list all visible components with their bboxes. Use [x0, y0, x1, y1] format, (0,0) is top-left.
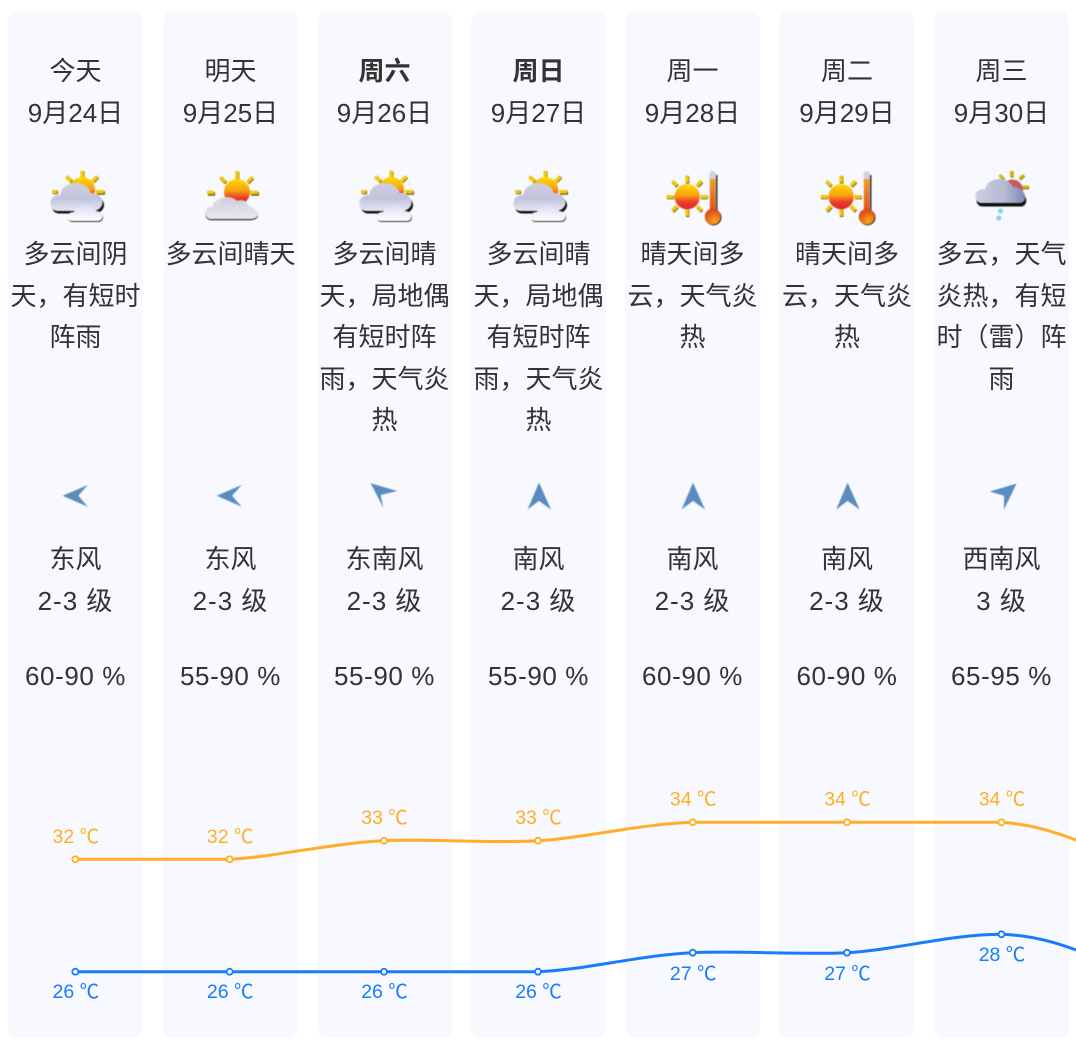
date heading	[645, 56, 740, 128]
panel: 今天	[8, 11, 143, 1038]
low temperature series: 26 ℃	[52, 981, 99, 1003]
date heading: 周日	[512, 56, 564, 86]
humidity: 55-90 %	[334, 660, 435, 690]
wind text: 西南风	[962, 544, 1040, 574]
high temperature series: 32 ℃	[207, 826, 254, 848]
weather description: 多云间晴天	[165, 239, 296, 269]
humidity: 60-90 %	[642, 660, 743, 690]
weather description: 热	[679, 322, 706, 352]
date heading	[183, 56, 278, 128]
wind text: 南风	[512, 544, 564, 574]
panel: 明天	[163, 11, 298, 1038]
wind text	[501, 544, 576, 616]
weather description	[627, 239, 758, 352]
wind text: 2-3 级	[501, 586, 576, 616]
wind text	[38, 544, 113, 616]
date heading: 9月30日	[954, 98, 1049, 128]
date heading: 9月26日	[337, 98, 432, 128]
weather description: 有短时阵	[332, 322, 436, 352]
date heading	[491, 56, 586, 128]
humidity: 60-90 %	[796, 660, 898, 690]
icon: thundershower cloud with sun	[975, 170, 1030, 222]
date heading	[337, 56, 432, 128]
high temperature series: 32 ℃	[52, 826, 99, 848]
date heading: 9月28日	[645, 98, 740, 128]
icon: wind arrow	[990, 483, 1017, 510]
low temperature series: 27 ℃	[824, 963, 871, 985]
low temperature series: 26 ℃	[361, 981, 408, 1003]
humidity: 55-90 %	[180, 660, 281, 690]
weather description: 云，天气炎	[627, 280, 758, 310]
date heading: 今天	[49, 56, 102, 86]
panel: 周三	[934, 11, 1069, 1038]
weather description	[319, 239, 450, 435]
humidity: 65-95 %	[951, 660, 1052, 690]
weather description	[936, 239, 1066, 394]
wind text: 东风	[49, 544, 102, 574]
weather description	[782, 239, 912, 352]
panel: 周一	[625, 11, 760, 1038]
icon: wind arrow	[681, 482, 706, 510]
icon: sun behind white cloud	[204, 170, 260, 222]
icon: cloudy with sun	[359, 170, 415, 223]
weather description: 阵雨	[49, 322, 102, 352]
weather description: 天，局地偶	[319, 280, 450, 310]
high temperature series: 33 ℃	[361, 807, 408, 829]
weather description: 多云，天气	[936, 239, 1066, 269]
high temperature series: 33 ℃	[515, 807, 562, 829]
low temperature series: 26 ℃	[207, 981, 254, 1003]
panel: 周日	[471, 11, 606, 1038]
icon: wind arrow	[836, 482, 860, 510]
low temperature series: 27 ℃	[670, 963, 717, 985]
icon: wind arrow	[370, 482, 398, 508]
weather description: 晴天间多	[640, 239, 744, 269]
high temperature series: 34 ℃	[670, 788, 717, 810]
date heading	[954, 56, 1049, 128]
wind text	[655, 544, 730, 616]
weather description: 晴天间多	[795, 239, 899, 269]
wind text: 2-3 级	[193, 586, 268, 616]
weather description: 多云间晴	[486, 239, 590, 269]
wind text	[962, 544, 1040, 616]
date heading	[799, 56, 895, 128]
weather description: 雨	[988, 364, 1014, 394]
weather description: 热	[525, 405, 552, 435]
date heading: 周三	[975, 56, 1028, 86]
high temperature series	[52, 788, 1076, 862]
wind text: 3 级	[976, 586, 1027, 616]
wind text	[193, 544, 268, 616]
wind text	[809, 544, 885, 616]
weather description: 云，天气炎	[782, 280, 912, 310]
icon: sun and thermometer	[820, 170, 876, 226]
weather description: 时（雷）阵	[936, 322, 1066, 352]
date heading: 9月27日	[491, 98, 586, 128]
date heading	[28, 56, 123, 128]
weather description: 天，局地偶	[473, 280, 604, 310]
wind text: 东南风	[345, 544, 424, 574]
high temperature series: 34 ℃	[824, 788, 871, 810]
weather description: 雨，天气炎	[319, 364, 450, 394]
date heading: 周六	[358, 56, 410, 86]
weather description	[10, 239, 140, 352]
weather description: 多云间阴	[23, 239, 128, 269]
date heading: 周二	[821, 56, 873, 86]
icon: wind arrow	[527, 482, 552, 510]
high temperature series: 34 ℃	[979, 788, 1025, 810]
date heading: 9月25日	[183, 98, 278, 128]
weather description: 有短时阵	[486, 322, 590, 352]
weather description: 炎热，有短	[936, 280, 1066, 310]
weather description: 多云间晴	[332, 239, 436, 269]
date heading: 明天	[204, 56, 256, 86]
wind text: 2-3 级	[655, 586, 730, 616]
wind text: 2-3 级	[347, 586, 422, 616]
humidity: 60-90 %	[25, 660, 126, 690]
date heading: 9月29日	[799, 98, 895, 128]
low temperature series: 28 ℃	[979, 944, 1025, 966]
wind text: 南风	[666, 544, 718, 574]
panel: 周六	[317, 11, 452, 1038]
weather description: 雨，天气炎	[473, 364, 604, 394]
wind text: 2-3 级	[38, 586, 113, 616]
wind text: 2-3 级	[809, 586, 885, 616]
icon: wind arrow	[216, 484, 242, 507]
weather description: 天，有短时	[10, 280, 140, 310]
weather description: 热	[834, 322, 860, 352]
weather description	[473, 239, 604, 435]
panel: 周二	[779, 11, 915, 1038]
low temperature series	[52, 931, 1076, 1003]
low temperature series: 26 ℃	[515, 981, 562, 1003]
date heading: 9月24日	[28, 98, 123, 128]
wind text	[345, 544, 424, 616]
icon: cloudy with sun	[513, 170, 569, 223]
date heading: 周一	[666, 56, 718, 86]
wind text: 南风	[821, 544, 873, 574]
icon: sun and thermometer	[666, 170, 722, 226]
icon: cloudy with sun	[50, 170, 106, 223]
weather description: 热	[371, 405, 398, 435]
humidity: 55-90 %	[488, 660, 589, 690]
wind text: 东风	[204, 544, 256, 574]
icon: wind arrow	[62, 484, 88, 507]
